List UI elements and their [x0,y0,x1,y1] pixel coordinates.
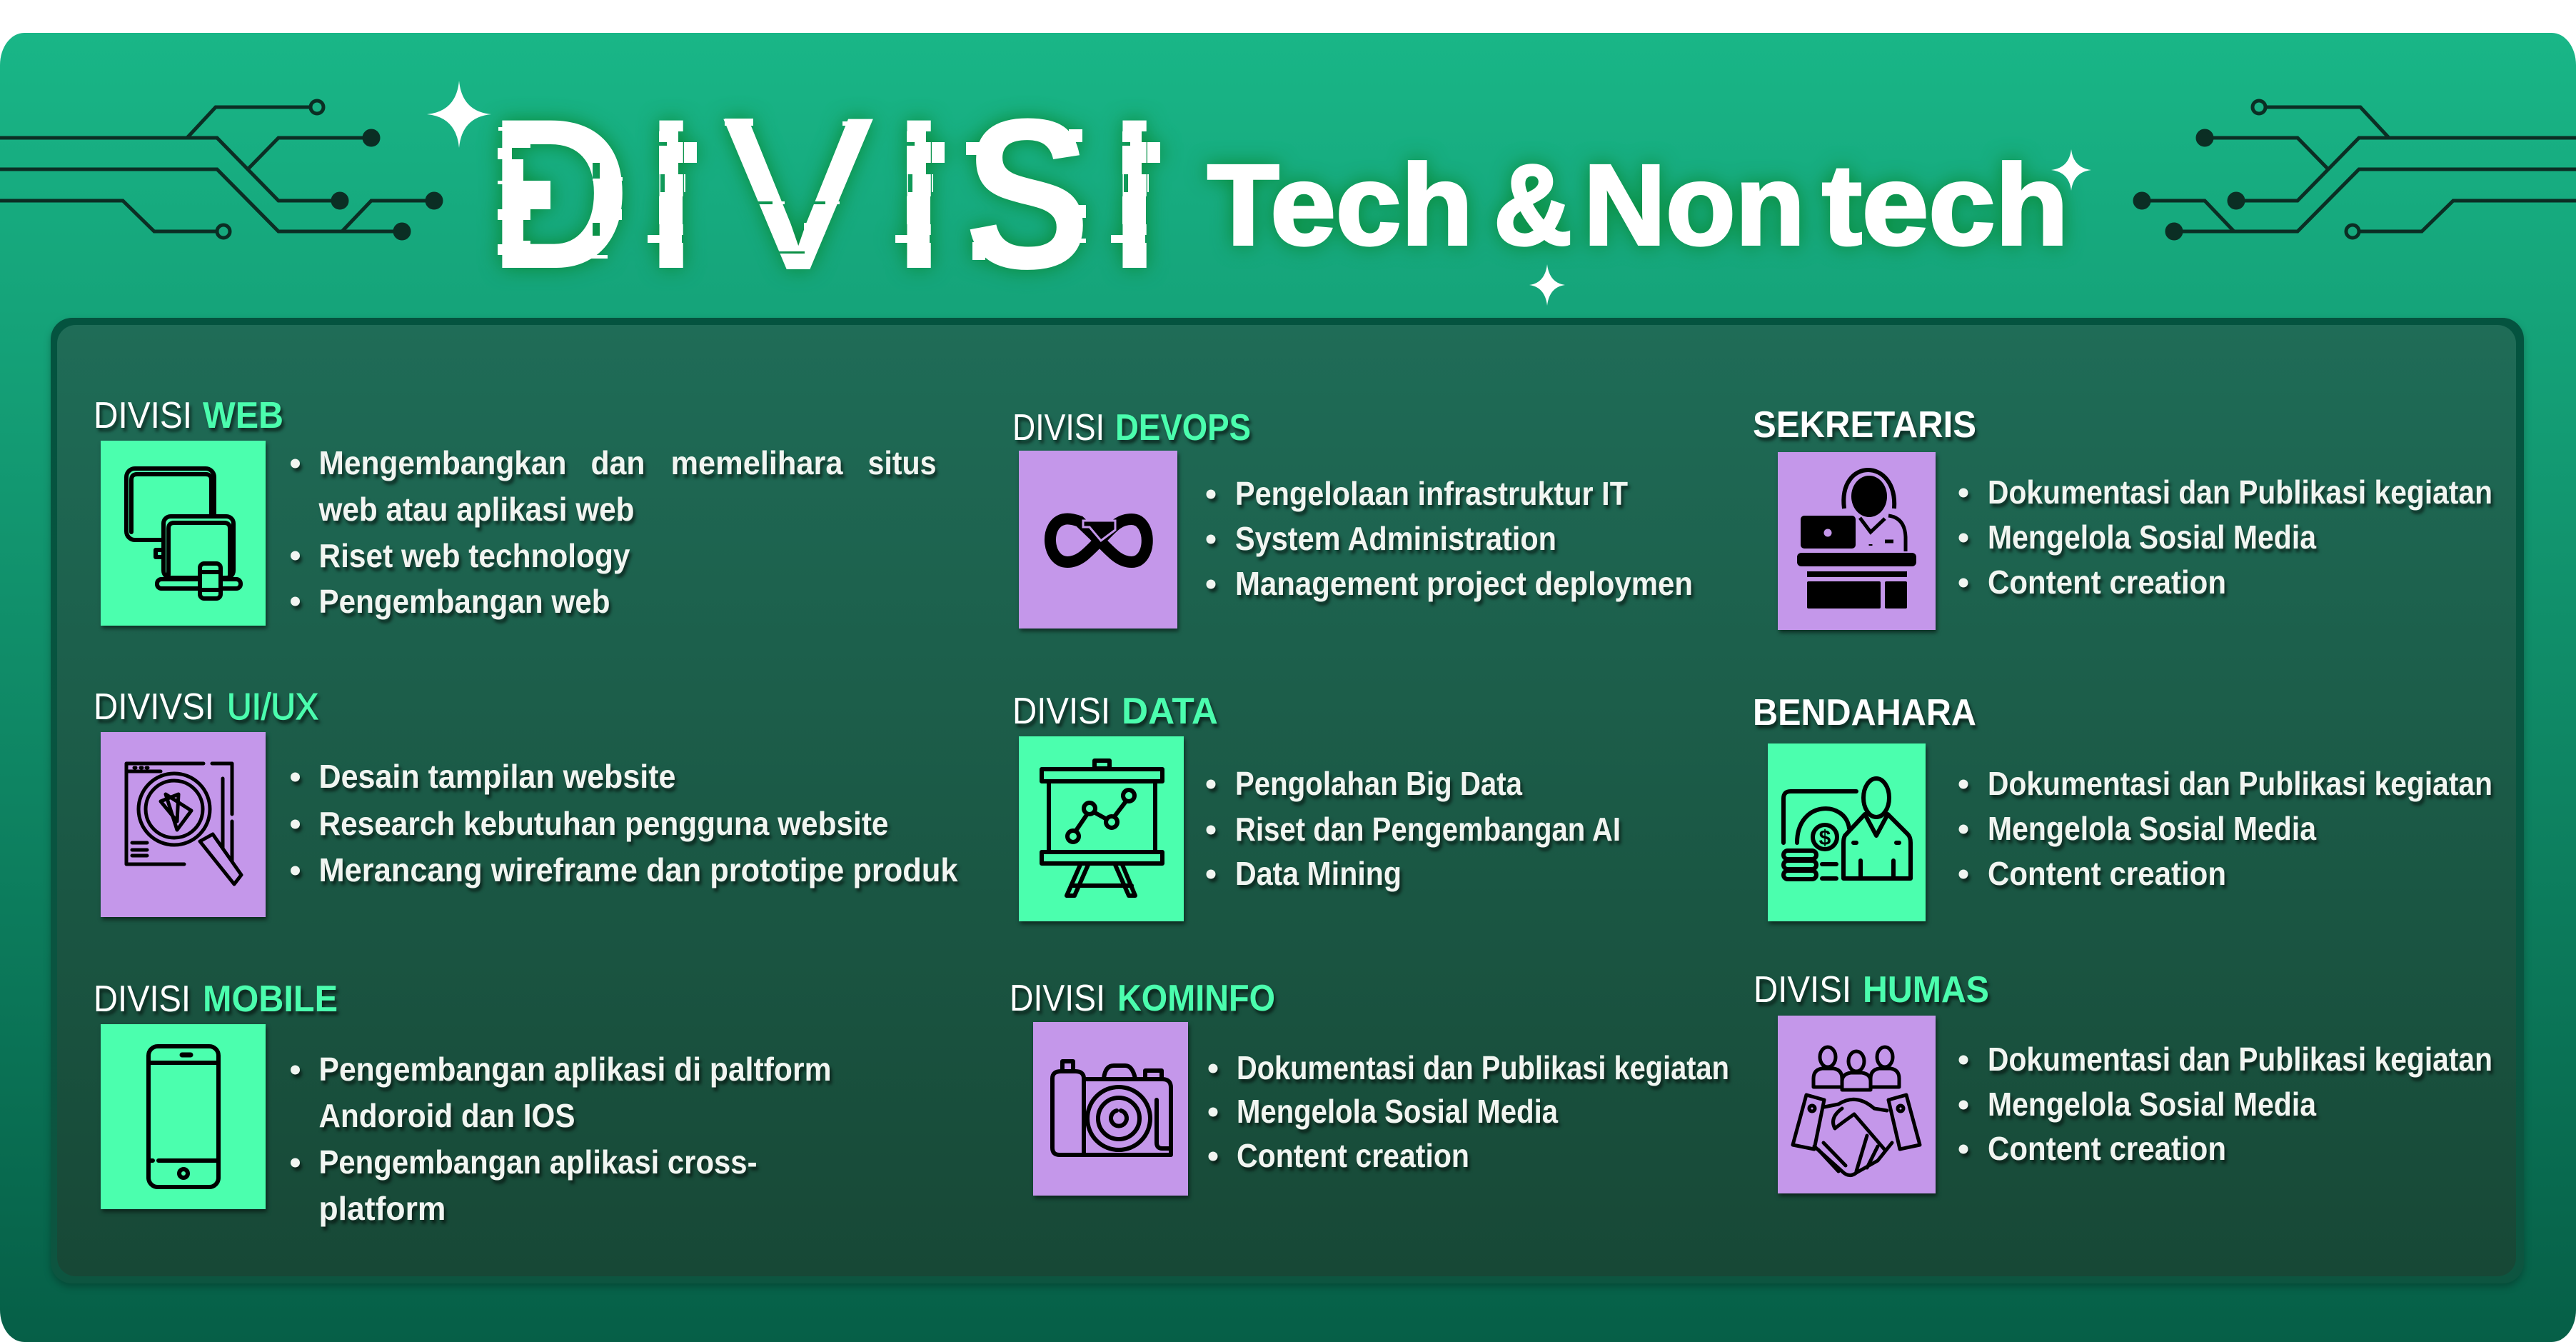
panel: sekretaris [1753,404,2492,630]
heading: bendahara: BENDAHARA [1753,692,1976,733]
bullet list: web: web atau aplikasi web [318,491,634,528]
heading: divisi kominfo [1010,978,1275,1019]
circuit decoration right [2135,101,2576,239]
bullet list: kominfo [1208,1049,1729,1174]
heading: divisi web: WEB [203,395,283,436]
heading: sekretaris: SEKRETARIS [1753,404,1976,446]
bullet list: web: situs [868,444,937,481]
bullet list: kominfo: Dokumentasi dan Publikasi kegiatan [1237,1049,1729,1086]
bullet list: ui/ux: Research kebutuhan pengguna website [318,805,888,842]
title: Tech & Non tech: tech [1822,141,2068,269]
bullet list: ui/ux: Desain tampilan website [318,758,675,795]
bullet list: ui/ux [291,758,958,888]
panel: divisi devops [1012,407,1693,629]
icon: treasurer with money: $ [1819,826,1831,850]
icon: smartphone [101,1024,266,1209]
bullet list: web: Riset web technology [318,537,630,574]
heading: divisi humas [1754,969,1989,1011]
sparkle 2 [2051,149,2091,191]
title: DIVISI glitch wordmark: I [648,74,694,314]
panel: divisi mobile [94,978,831,1227]
bullet list: bendahara: Dokumentasi dan Publikasi kegiatan [1988,765,2492,802]
bullet list: humas: Dokumentasi dan Publikasi kegiatan [1988,1041,2492,1078]
title: DIVISI glitch wordmark: D [489,74,630,314]
bullet list: data [1207,765,1621,892]
bullet list: mobile: platform [318,1190,446,1227]
title: DIVISI glitch wordmark: I [1112,74,1157,314]
heading: divisi ui/ux: UI/UX [227,686,318,728]
bullet list: mobile [291,1051,831,1227]
title: DIVISI glitch wordmark: V [725,74,873,314]
heading: divisi data: DATA [1122,691,1218,732]
icon: handshake and team [1778,1016,1936,1193]
icon: magnifier on browser [101,732,266,917]
bullet list: sekretaris: Mengelola Sosial Media [1988,519,2316,556]
panel: divisi kominfo [1010,978,1729,1196]
heading: divisi kominfo: KOMINFO [1117,978,1275,1019]
heading: divisi ui/ux [94,686,318,728]
title: Tech & Non tech [1207,141,2068,269]
heading: divisi web [94,395,283,436]
heading: divisi devops [1012,407,1251,449]
heading: divisi web: DIVISI [94,395,192,436]
bullet list: humas: Mengelola Sosial Media [1988,1086,2316,1123]
bullet list: data: Data Mining [1235,855,1402,892]
heading: divisi mobile: DIVISI [94,978,191,1020]
bullet list: ui/ux: Merancang wireframe dan prototipe produk [318,851,958,888]
bullet list: mobile: Pengembangan aplikasi di paltform [318,1051,831,1088]
bullet list: sekretaris: Content creation [1988,564,2226,601]
bullet list: web: Mengembangkan [318,444,567,481]
bullet list: web: dan [591,444,645,481]
bullet list: sekretaris [1959,474,2492,601]
bullet list: bendahara: Mengelola Sosial Media [1988,810,2316,847]
heading: divisi data: DIVISI [1012,691,1110,732]
bullet list: devops: Pengelolaan infrastruktur IT [1235,475,1628,512]
bullet list: mobile: Andoroid dan IOS [318,1097,575,1134]
title: DIVISI glitch wordmark: I [896,74,942,314]
heading: divisi humas: HUMAS [1863,969,1989,1011]
sparkle 3 [1529,264,1565,306]
heading: divisi devops: DIVISI [1012,407,1105,449]
bullet list: kominfo: Mengelola Sosial Media [1237,1093,1558,1130]
heading: divisi data [1012,691,1218,732]
bullet list: mobile: Pengembangan aplikasi cross- [318,1143,757,1181]
bullet list: bendahara: Content creation [1988,855,2226,892]
heading: divisi humas: DIVISI [1754,969,1851,1011]
bullet list: humas: Content creation [1988,1130,2226,1167]
heading: divisi ui/ux: DIVIVSI [94,686,214,728]
bullet list: data: Pengolahan Big Data [1235,765,1522,802]
icon: secretary at desk [1778,452,1936,630]
bullet list: devops: Management project deploymen [1235,565,1693,602]
title: Tech & Non tech: & [1494,141,1572,269]
icon: infinity loop [1019,451,1177,629]
bullet list: kominfo: Content creation [1237,1137,1469,1174]
icon: camera [1033,1022,1188,1196]
title: Tech & Non tech: Non [1584,141,1805,269]
icon: presentation board [1019,736,1184,921]
bullet list: humas [1959,1041,2492,1167]
panel: divisi web [94,395,937,626]
title: DIVISI glitch wordmark: S [965,74,1090,314]
heading: divisi kominfo: DIVISI [1010,978,1105,1019]
icon: treasurer with money [1768,743,1926,921]
heading: divisi devops: DEVOPS [1115,407,1251,449]
heading: divisi mobile: MOBILE [203,978,338,1020]
bullet list: devops [1207,475,1693,602]
panel: divisi humas [1754,969,2492,1193]
sparkle 1 [427,81,491,148]
bullet list: devops: System Administration [1235,520,1556,557]
icon: devices [101,441,266,626]
panel: divisi data [1012,691,1621,921]
bullet list: data: Riset dan Pengembangan AI [1235,811,1621,848]
circuit decoration left [0,101,441,239]
bullet list: web: Pengembangan web [318,583,610,620]
bullet list: web [291,444,937,620]
bullet list: web: memelihara [671,444,843,481]
bullet list: sekretaris: Dokumentasi dan Publikasi kegiatan [1988,474,2492,511]
main panel [51,318,2524,1283]
panel: divisi ui/ux [94,686,958,917]
panel: bendahara [1753,692,2492,921]
title: DIVISI glitch wordmark [488,106,1170,281]
heading: divisi mobile [94,978,338,1020]
bullet list: bendahara [1959,765,2492,892]
title: Tech & Non tech: Tech [1207,141,1473,269]
